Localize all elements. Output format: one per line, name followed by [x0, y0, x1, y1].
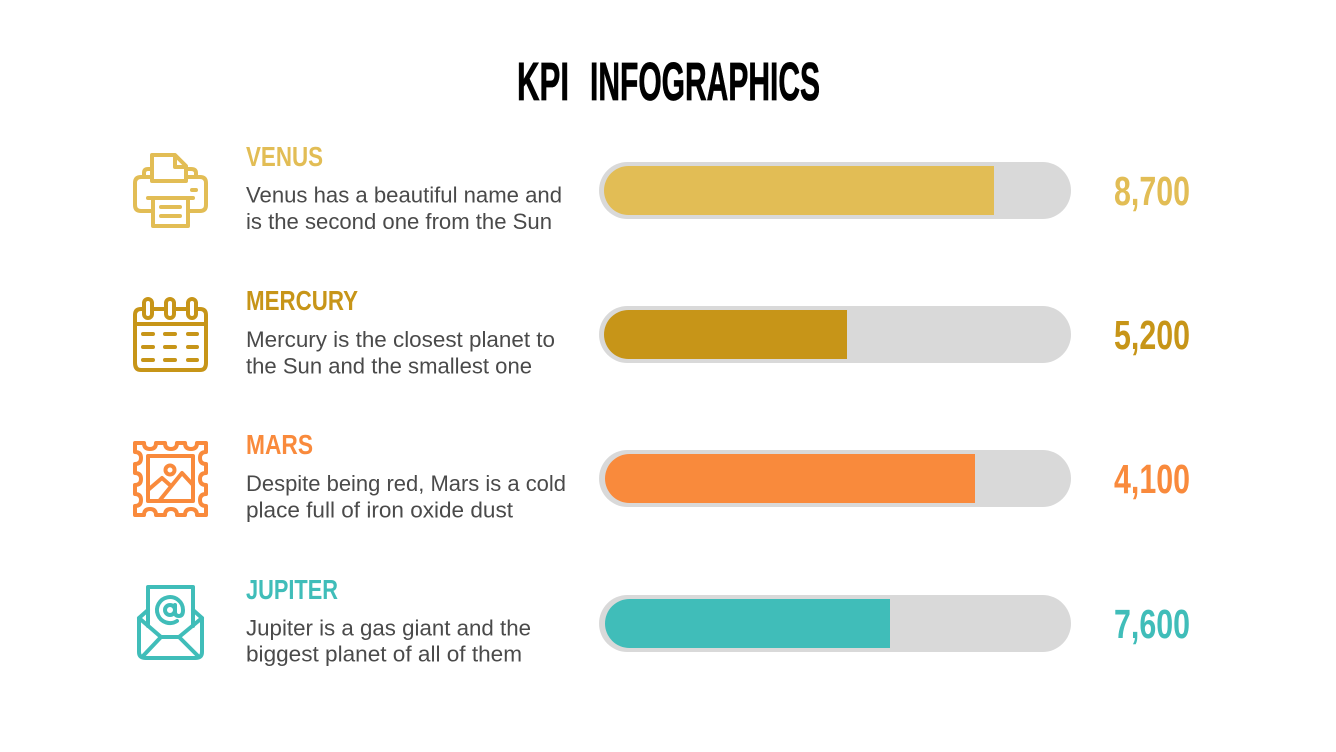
- panel: Venus: [135, 141, 1190, 234]
- icon: envelope with at sign: [139, 587, 202, 658]
- bar: Mars: [599, 450, 1071, 507]
- heading: Venus: VENUS: [246, 141, 323, 172]
- heading: Mercury: MERCURY: [246, 285, 358, 316]
- bar: Jupiter: [599, 595, 1071, 652]
- text: Mercury description: the Sun and the smallest one: [246, 354, 532, 378]
- panel: Mars: [135, 429, 1190, 522]
- value: Mars: 4,100: [1114, 456, 1190, 502]
- icon: printer: [135, 155, 206, 226]
- title: INFOGRAPHICS: [590, 52, 820, 112]
- value: Jupiter: 7,600: [1114, 601, 1190, 647]
- text: Jupiter description: Jupiter is a gas giant and the: [246, 616, 531, 640]
- text: Mars description: Despite being red, Mars is a cold: [246, 471, 566, 496]
- panel: Jupiter: [139, 574, 1190, 666]
- bar: Venus: [599, 162, 1071, 219]
- heading: Jupiter: JUPITER: [246, 574, 338, 605]
- heading: Mars: MARS: [246, 429, 313, 460]
- text: Jupiter description: biggest planet of all of them: [246, 642, 522, 666]
- text: Venus description: Venus has a beautiful name and: [246, 182, 562, 208]
- panel: Mercury: [135, 285, 1190, 378]
- value: Venus: 8,700: [1114, 168, 1190, 214]
- text: Venus description: is the second one from the Sun: [246, 209, 552, 234]
- text: Mars description: place full of iron oxide dust: [246, 498, 513, 522]
- value: Mercury: 5,200: [1114, 312, 1190, 358]
- bar: Mercury: [599, 306, 1071, 363]
- icon: calendar: [135, 299, 206, 370]
- title: KPI: [517, 52, 569, 112]
- icon: stamp with picture: [135, 443, 206, 515]
- text: Mercury description: Mercury is the closest planet to: [246, 327, 555, 352]
